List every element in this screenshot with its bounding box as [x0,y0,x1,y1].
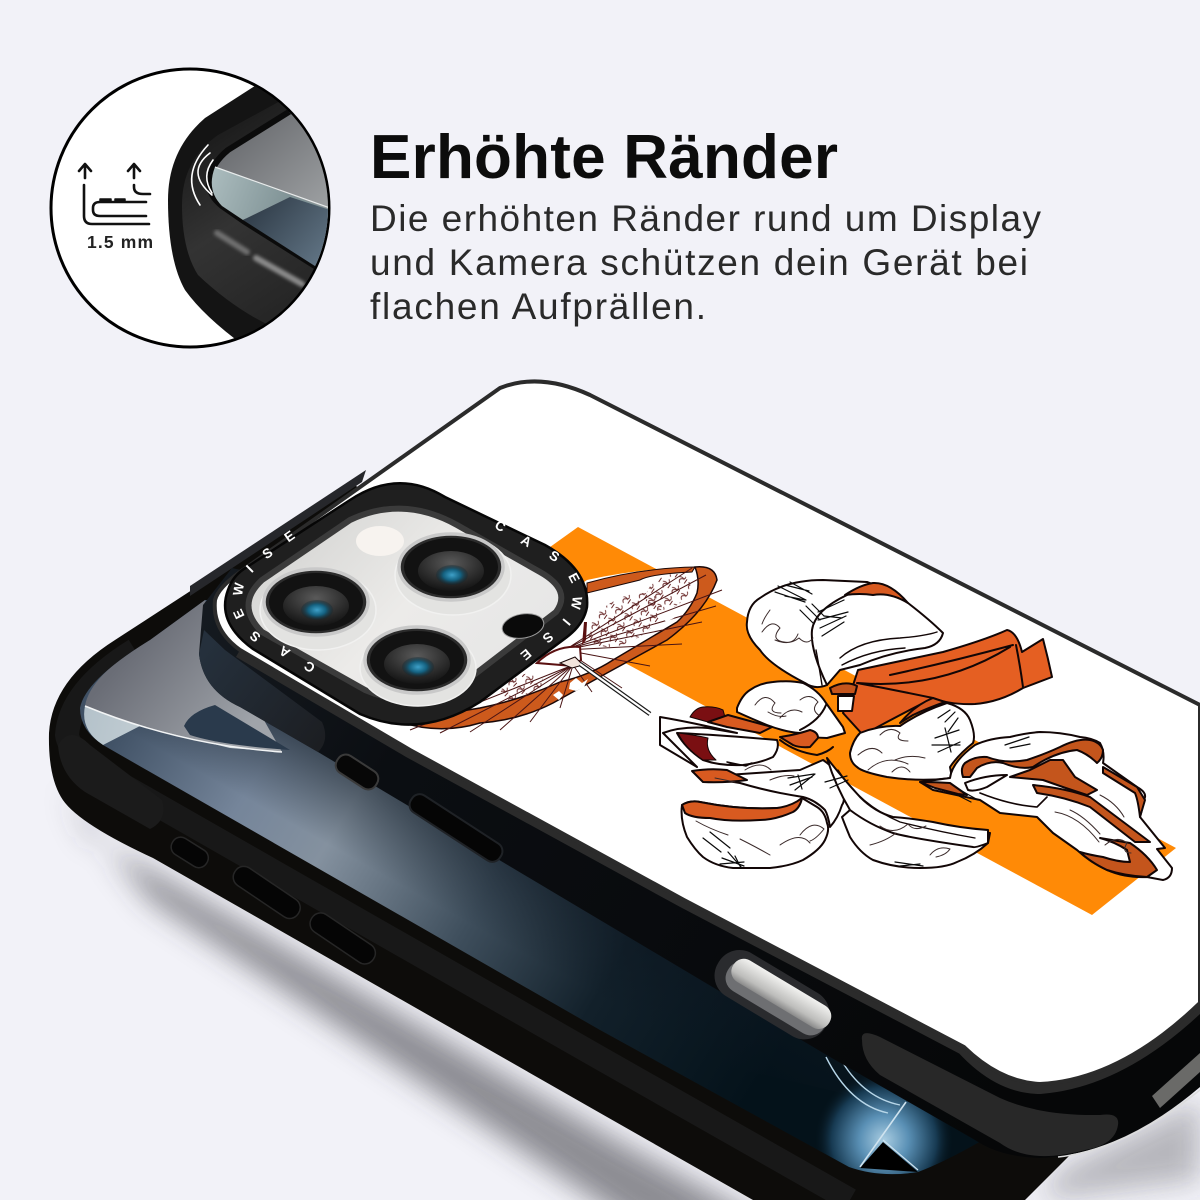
CASEWISE ring lettering: A [276,643,293,661]
side button [406,791,506,865]
usb-c port [706,941,839,1049]
rim highlight [67,650,850,1200]
right sleeve [850,703,974,780]
CASEWISE ring lettering: I [559,616,573,628]
icon: impact arcs [192,145,213,205]
upper sleeve [747,580,943,687]
pine tufts [703,582,1030,868]
artwork: kimono figure [660,580,1172,880]
lower mid bowl sleeve [842,810,990,868]
body text: flachen Aufprällen. [370,286,706,327]
CASEWISE ring lettering: I [243,562,256,575]
CASEWISE ring lettering: S [540,629,556,646]
lens bumps [260,535,511,706]
body text: und Kamera schützen dein Gerät bei [370,242,1028,283]
CASEWISE ring lettering: C [492,517,508,535]
side buttons on lower phone [168,834,379,968]
lens 3 [365,627,469,693]
cloud and crane linework [696,610,1131,857]
corner carbon bump [862,1033,1118,1156]
inset circle: raised edge detail [51,69,345,350]
CASEWISE ring lettering: E [518,646,534,663]
umbrella handle [580,664,650,714]
CASEWISE ring lettering [230,517,585,676]
CASEWISE ring lettering: C [301,658,318,676]
lower phone: case frame [49,470,1075,1200]
head, arm and hair [660,717,737,767]
body text [370,198,1042,327]
umbrella rim [400,567,717,729]
trailing robe [920,732,1172,880]
carbon bump by camera [199,630,325,752]
artwork: umbrella [400,567,722,733]
CASEWISE ring lettering: W [230,581,247,597]
label: 1.5 mm: 1.5 mm [87,232,153,252]
CASEWISE ring lettering: S [259,545,275,562]
carbon bump on frame [58,735,164,829]
mid sleeve [693,760,844,827]
CASEWISE ring lettering: E [281,528,297,545]
upper phone: white back [215,381,1200,1086]
CASEWISE ring lettering: S [247,628,263,645]
umbrella ribs [410,568,722,733]
lidar sensor [500,611,546,641]
body text: Die erhöhten Ränder rund um Display [370,198,1042,239]
heading: Erhöhte Ränder [370,123,838,192]
CASEWISE ring lettering: E [230,607,248,621]
speaker grille [1152,1053,1200,1108]
artwork: orange band [490,527,1176,915]
lower screen [80,600,1000,1200]
upper phone: side wall [199,568,1200,1158]
obi sash [843,630,1052,735]
CASEWISE ring lettering: S [547,547,562,565]
lens 1 [264,569,368,635]
icon: 1.5 mm raised edge diagram [79,164,150,224]
lower left bowl sleeve [682,798,828,868]
CASEWISE ring lettering: A [518,532,534,550]
island outer ring [225,483,587,725]
lens 2 [399,534,503,600]
CASEWISE ring lettering: W [568,595,585,611]
central sleeve [737,681,845,738]
CASEWISE ring lettering: E [565,570,583,585]
mute switch slot [332,751,382,793]
camera island [225,483,587,725]
drop shadows [65,790,1200,1200]
flash [356,526,404,556]
camera window [248,509,561,699]
inset phone corner [168,86,328,338]
bottom highlight [1058,1090,1200,1157]
